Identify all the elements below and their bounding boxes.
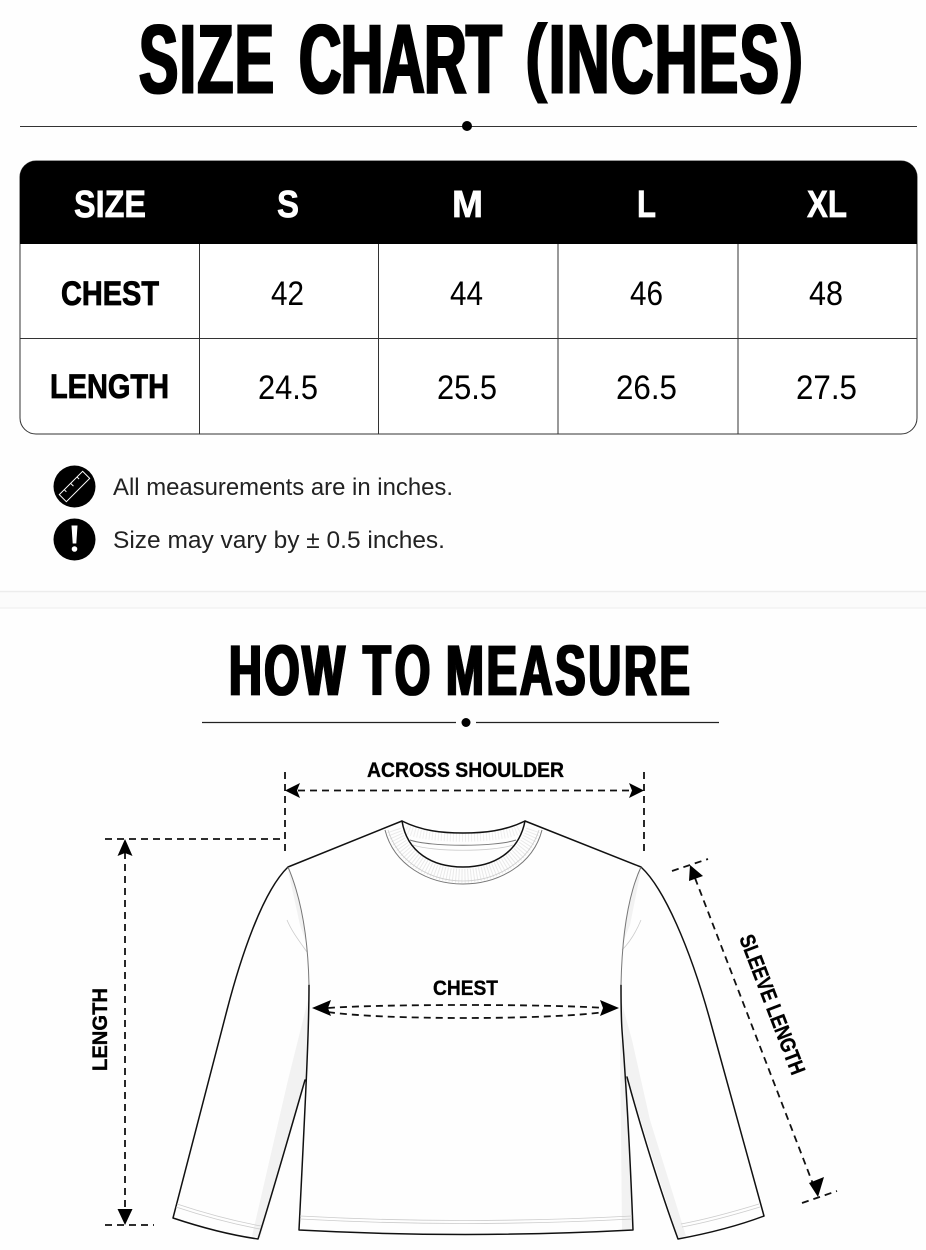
title: CHART <box>299 6 502 115</box>
title: INCHES <box>549 6 779 115</box>
shirt outline: right shoulder and sleeve <box>525 821 764 1239</box>
how to measure heading: TO <box>363 631 430 710</box>
note: measurements in inches <box>54 466 453 508</box>
shirt body sides and hem <box>299 985 633 1234</box>
title <box>139 6 804 115</box>
armhole seams <box>288 867 641 985</box>
icon: ruler <box>54 466 96 508</box>
across shoulder measurement <box>285 758 644 852</box>
length row: 27.5 <box>796 369 857 407</box>
sleeve shading <box>252 870 686 1238</box>
heading divider <box>202 718 719 727</box>
header row labels: SIZE <box>74 184 146 226</box>
label: chest: CHEST <box>433 976 498 1000</box>
hem stitching <box>176 1204 760 1229</box>
size table <box>20 161 917 434</box>
how to measure heading: MEASURE <box>446 631 690 710</box>
header row labels: XL <box>807 184 847 226</box>
label: across shoulder: ACROSS SHOULDER <box>367 758 564 782</box>
title: ( <box>524 8 548 104</box>
collar ribbing <box>385 829 542 884</box>
armpit creases <box>287 920 641 952</box>
collar neckline <box>402 821 525 867</box>
chest row: 48 <box>809 275 843 313</box>
note: size variance <box>54 518 445 560</box>
sleeve length measurement <box>672 859 837 1203</box>
shirt outline: left sleeve <box>173 821 402 1239</box>
table grid lines <box>20 244 917 434</box>
header row labels: S <box>277 184 299 226</box>
chest measurement <box>312 976 619 1018</box>
header row labels: M <box>452 184 483 226</box>
note text: Size may vary by ± 0.5 inches. <box>113 527 445 554</box>
label: sleeve length: SLEEVE LENGTH <box>734 931 810 1078</box>
length row: 25.5 <box>437 369 497 407</box>
length row: 24.5 <box>258 369 318 407</box>
title divider <box>20 121 917 131</box>
title: SIZE <box>139 6 274 115</box>
chest row: 42 <box>271 275 304 313</box>
note text: All measurements are in inches. <box>113 474 453 501</box>
chest row: CHEST <box>61 275 159 313</box>
header row labels: L <box>637 184 656 226</box>
dashed extents <box>105 839 284 1225</box>
length measurement <box>88 839 284 1225</box>
how to measure heading <box>229 631 690 710</box>
table header bar <box>20 161 917 244</box>
dashed extents <box>672 859 837 1203</box>
garment: long sleeve sweatshirt <box>173 821 764 1239</box>
length row <box>50 368 857 407</box>
dashed extents <box>285 772 644 852</box>
chest row: 46 <box>630 275 663 313</box>
header row labels <box>74 184 847 226</box>
arrowheads <box>312 1000 619 1016</box>
label: length: LENGTH <box>88 988 112 1071</box>
length row: 26.5 <box>616 369 677 407</box>
chest row: 44 <box>450 275 483 313</box>
length row: LENGTH <box>50 368 169 406</box>
table frame <box>20 161 917 434</box>
chest row <box>61 275 843 313</box>
arrowheads <box>285 783 644 798</box>
dashed ellipse <box>328 1005 604 1018</box>
arrowheads <box>689 865 824 1197</box>
how to measure heading: HOW <box>229 631 345 710</box>
icon: exclamation <box>54 518 96 560</box>
arrowheads <box>118 839 132 1225</box>
title: ) <box>781 8 804 104</box>
